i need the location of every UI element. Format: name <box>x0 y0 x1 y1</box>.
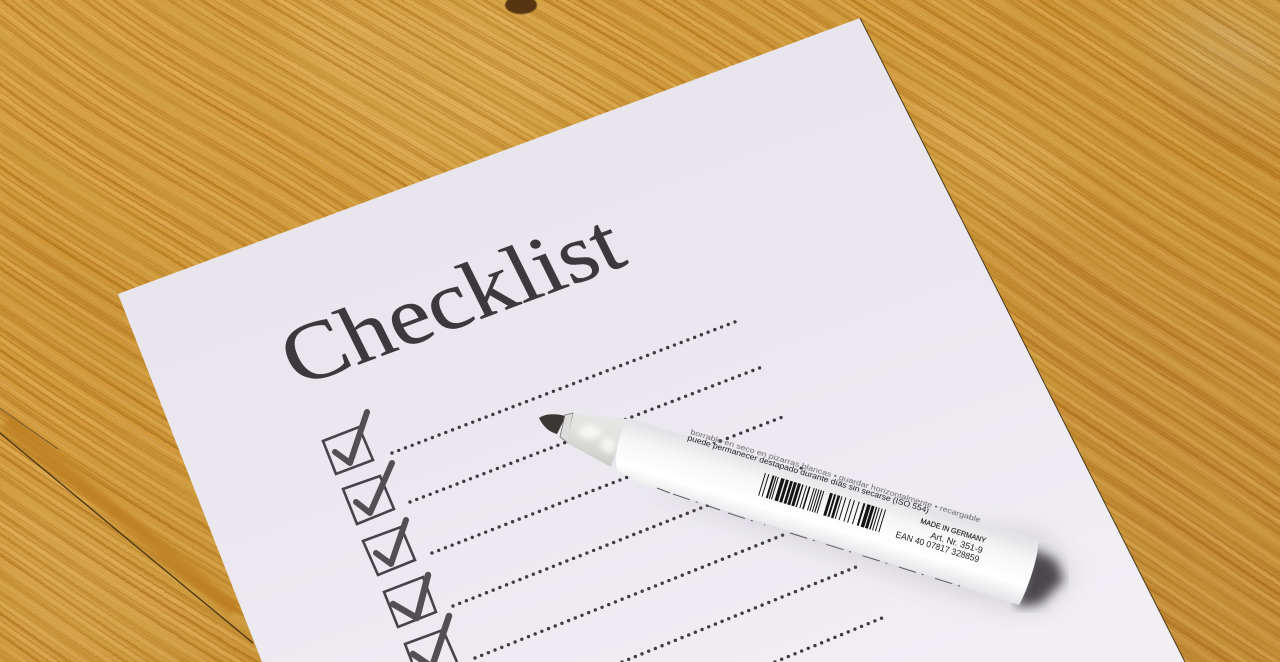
dotted line 2 <box>410 367 762 502</box>
wood board seam <box>0 433 253 643</box>
pen small print line 2: puede permanecer destapado durante días sin secarse (ISO 554) <box>686 433 931 515</box>
pen small print line 1: borrable en seco en pizarras blancas • guardar horizontalmente • recargable <box>689 429 981 525</box>
pen cast shadow <box>640 490 1078 615</box>
checkbox 5 <box>405 616 457 662</box>
pen nib <box>539 414 566 434</box>
wood knot <box>505 0 537 14</box>
checkbox 1 <box>323 412 373 474</box>
pen label: EAN number: EAN 40 07817 328859 <box>894 529 981 564</box>
pen body <box>616 418 1038 605</box>
dotted line 7 <box>775 618 882 662</box>
checkbox 4 <box>384 575 436 627</box>
dotted line 3 <box>432 416 785 553</box>
dotted line 4 <box>453 466 807 606</box>
pen label: made in Germany: MADE IN GERMANY <box>919 516 987 545</box>
title: Checklist: Checklist <box>265 197 638 404</box>
orange band beside seam <box>5 422 235 610</box>
marker pen <box>539 413 1038 605</box>
dotted line 5 <box>475 533 788 658</box>
paper right edge shadow line <box>860 18 1185 662</box>
pen printed marks along lower edge <box>657 488 966 588</box>
faint seam <box>0 408 58 449</box>
pen translucent section <box>567 414 628 467</box>
pen label: article number: Art. Nr. 351-9 <box>929 530 984 555</box>
dotted checklist lines <box>392 320 882 662</box>
barcode <box>758 473 886 532</box>
dotted line 1 <box>392 320 740 453</box>
checkbox 3 <box>363 520 415 575</box>
checkbox 2 <box>343 463 394 524</box>
pen collar <box>560 413 573 443</box>
dotted line 6 <box>622 567 856 662</box>
pen translucent mottling <box>579 425 615 453</box>
